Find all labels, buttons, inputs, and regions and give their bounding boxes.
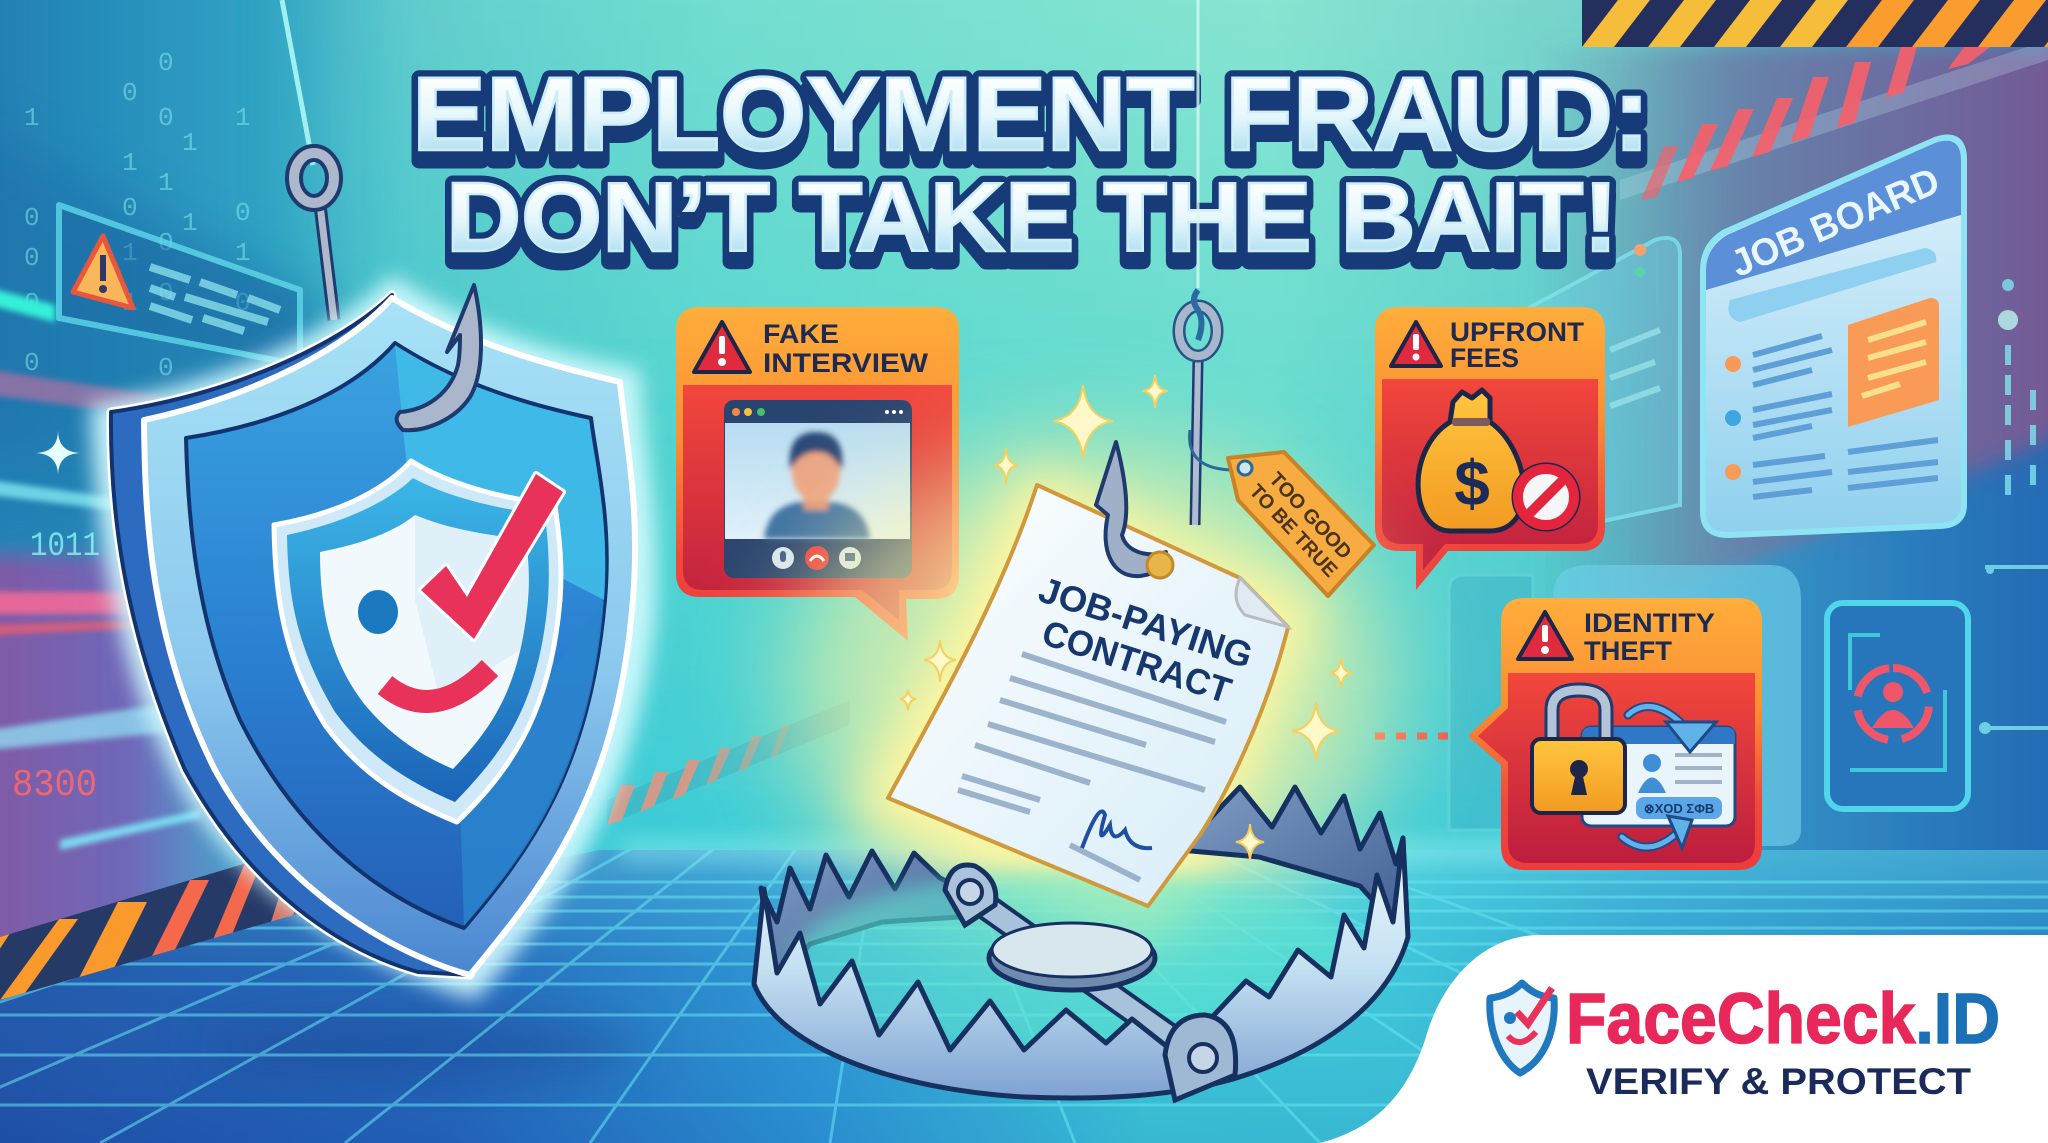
icon: money bag: $ [1454, 447, 1490, 519]
icon: swap arrows [1622, 706, 1716, 848]
emblem check mark [421, 474, 563, 639]
bear trap back jaw [761, 787, 1406, 985]
sparkles around contract [900, 375, 1352, 860]
title line 1: EMPLOYMENT FRAUD: [412, 56, 1650, 173]
left hook barb over shield [397, 285, 481, 430]
tag text: TO BE TRUE [1245, 480, 1341, 582]
heading: fake interview: FAKE [763, 319, 839, 349]
sparkle left [36, 430, 80, 476]
heading: identity theft: IDENTITY [1584, 608, 1715, 638]
decorative binary code columns: 0 [235, 288, 251, 318]
decorative binary code columns: 1 [158, 168, 174, 198]
emblem smile [385, 668, 490, 701]
decorative binary code columns: 1 [122, 238, 138, 268]
brand name: FaceCheck.ID [1566, 980, 2000, 1059]
title line 2: DON’T TAKE THE BAIT! [446, 162, 1618, 272]
blurred person [764, 432, 870, 539]
heading: fake interview [763, 319, 929, 378]
contract title: CONTRACT [1037, 612, 1236, 711]
back window panel [1488, 238, 1680, 545]
tag text: TOO GOOD [1264, 468, 1356, 564]
decorative binary code columns: 1 [235, 238, 251, 268]
job board orange card [1848, 298, 1939, 427]
shield side [111, 295, 470, 975]
icon: warning triangle [1391, 322, 1441, 366]
left numeric readouts: 1011 [30, 528, 100, 566]
paper fold [1236, 578, 1288, 627]
trap pan [989, 923, 1155, 990]
hazard stripes top right [1582, 0, 2048, 47]
video call window [724, 400, 912, 578]
decorative binary code columns: 1 [182, 208, 198, 238]
shield glow [90, 275, 656, 1000]
logo panel [1320, 935, 2048, 1143]
trap hinge left [945, 865, 996, 925]
callout: identity theft [1468, 598, 1762, 870]
icon: money bag [1418, 390, 1524, 531]
decorative binary code columns: 0 [158, 353, 174, 383]
left fishing hook shank [294, 153, 334, 320]
job board header [1706, 141, 1961, 290]
shield face band [144, 298, 635, 975]
logo shield icon [1490, 983, 1554, 1073]
right background panels [1449, 47, 2048, 846]
decorative binary code columns: 0 [158, 103, 174, 133]
icon: id card: ⊗XOD ΣΦB [1644, 801, 1714, 816]
icon: warning triangle [1518, 612, 1572, 659]
icon: padlock [1532, 690, 1625, 813]
title line 2: DON’T TAKE THE BAIT! [446, 173, 1618, 283]
trap hinge right [1165, 1015, 1236, 1100]
job board title: JOB BOARD [1725, 160, 1946, 286]
decorative binary code columns: 0 [24, 243, 40, 273]
floor grid [0, 830, 2048, 1143]
contract paper [888, 485, 1288, 906]
tagline: VERIFY & PROTECT [1586, 1061, 1971, 1102]
center fishing hook [1096, 290, 1217, 578]
icon: id card [1582, 727, 1735, 826]
left numeric readouts [12, 528, 100, 807]
left numeric readouts: 8300 [12, 764, 97, 807]
dotted connector [1375, 732, 1455, 740]
heading: identity theft: THEFT [1584, 636, 1672, 666]
contract title: JOB-PAYING [1034, 569, 1258, 676]
decorative binary code columns: 0 [24, 348, 40, 378]
icon: warning triangle [694, 322, 750, 372]
trap front jaw [754, 838, 1408, 1098]
title [412, 56, 1650, 283]
decorative binary code columns: 0 [235, 198, 251, 228]
signature [1082, 811, 1152, 848]
price tag [1190, 430, 1374, 596]
decorative binary code columns: 0 [158, 278, 174, 308]
heading: upfront fees: UPFRONT [1450, 317, 1585, 347]
decorative binary code columns: 1 [182, 128, 198, 158]
icon: prohibition sign [1513, 464, 1579, 530]
job listings [1753, 336, 1938, 497]
decorative binary code columns: 0 [24, 288, 40, 318]
contract glow [790, 440, 1390, 940]
decorative binary code columns: 1 [24, 103, 40, 133]
red diagonal stripes [1641, 47, 1990, 200]
left warning panel [59, 205, 300, 365]
decorative binary code columns: 0 [24, 203, 40, 233]
title line 2: DON’T TAKE THE BAIT! [446, 162, 1618, 272]
heading: upfront fees [1450, 317, 1585, 373]
decorative binary code columns: 0 [122, 193, 138, 223]
callout: upfront fees [1375, 307, 1605, 590]
hazard stripe band center, fading [607, 700, 850, 825]
heading: upfront fees: FEES [1450, 343, 1519, 373]
decorative binary code columns: 0 [158, 48, 174, 78]
shield [90, 275, 656, 1000]
title line 1: EMPLOYMENT FRAUD: [412, 56, 1650, 173]
bear trap front jaw and pan [754, 838, 1408, 1100]
decorative binary code columns [24, 48, 251, 383]
center fishing line [1196, 0, 1200, 288]
inner emblem [274, 461, 561, 822]
heading: identity theft [1584, 608, 1715, 666]
left fishing line [282, 0, 313, 165]
job board panel [1703, 138, 1964, 535]
callout: fake interview [676, 307, 959, 641]
emblem eye [358, 590, 398, 634]
trap center ground [790, 870, 1370, 1060]
contract body lines [958, 654, 1226, 880]
light streaks on left [0, 288, 220, 850]
title line 1: EMPLOYMENT FRAUD: [412, 67, 1650, 184]
hazard stripe band left [0, 864, 298, 1000]
decorative binary code columns: 1 [122, 288, 138, 318]
lower bright panel [1553, 565, 1801, 846]
shield mid panel [186, 343, 607, 928]
decorative binary code columns: 0 [122, 78, 138, 108]
icon: warning triangle in left panel [73, 236, 133, 308]
trap arm [960, 888, 1208, 1064]
small scan panel [1827, 603, 1968, 809]
heading: fake interview: INTERVIEW [763, 348, 929, 378]
decorative binary code columns: 1 [235, 103, 251, 133]
decorative binary code columns: 1 [122, 148, 138, 178]
decorative binary code columns: 0 [158, 228, 174, 258]
